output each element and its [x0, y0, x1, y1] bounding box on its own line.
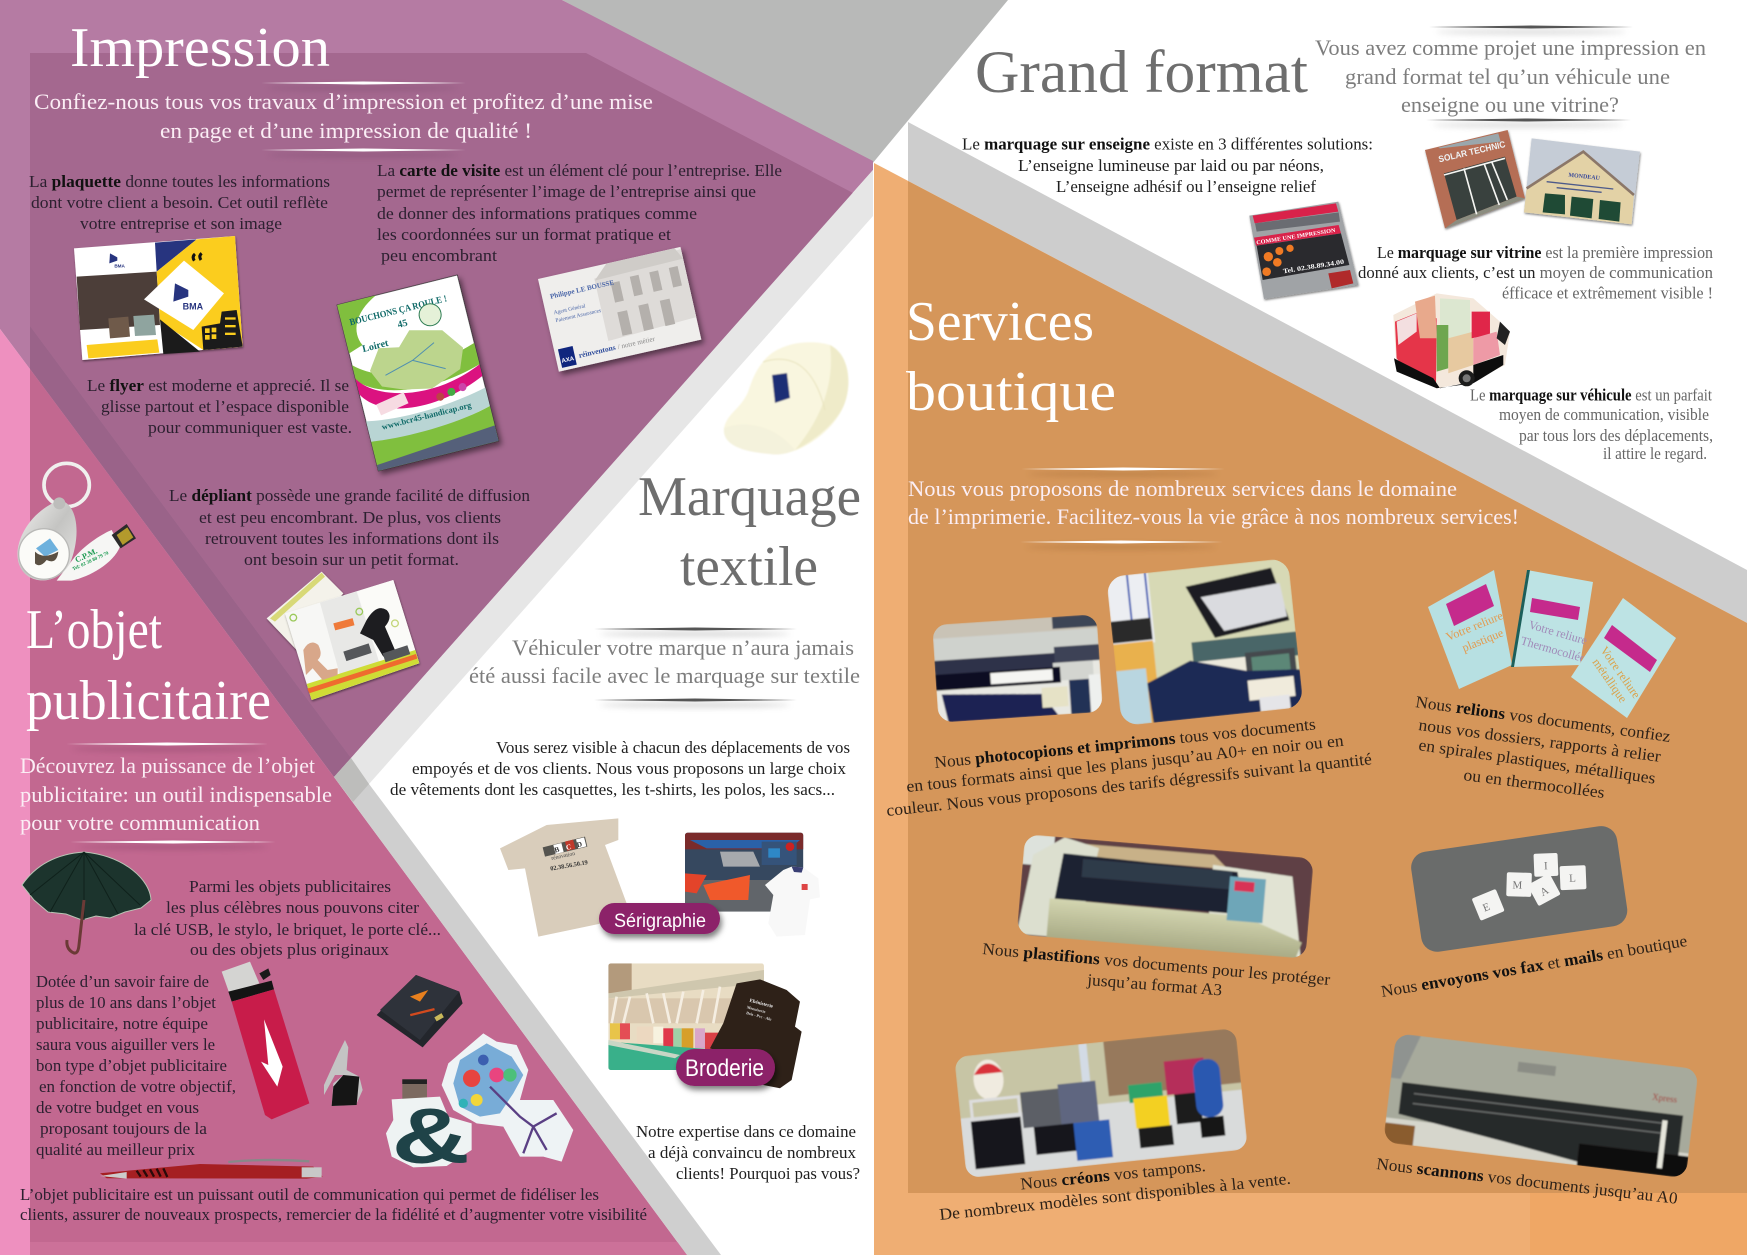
text: textile intro — [469, 635, 860, 688]
text: plastifions: Nous plastifions vos documents pour les protéger — [982, 939, 1331, 989]
text: savoir faire: saura vous aiguiller vers le — [36, 1035, 215, 1054]
icon: tile M — [1506, 872, 1532, 897]
image: carte de visite: AXA — [561, 356, 575, 365]
text: services intro: de l’imprimerie. Facilitez-vous la vie grâce à nos nombreux services! — [908, 504, 1519, 529]
photo: large format printer — [932, 614, 1103, 723]
text: objet intro — [20, 753, 332, 835]
background: light grey diagonal band — [351, 170, 873, 784]
label: broderie: Broderie — [685, 1055, 764, 1082]
text: services intro: Nous vous proposons de nombreux services dans le domaine — [908, 476, 1457, 501]
image: carte de visite: / notre métier — [617, 335, 656, 351]
text: depliant: retrouvent toutes les informations dont ils — [205, 529, 499, 548]
image: book thermocollee: Thermocollée — [1519, 633, 1587, 665]
background: services light orange — [874, 163, 1747, 1255]
text: textile intro: été aussi facile avec le marquage sur textile — [469, 663, 860, 688]
text: parmi les objets: ou des objets plus originaux — [190, 940, 390, 959]
text: photocopions: Nous photocopions et imprimons tous vos documents — [933, 714, 1316, 772]
rule: services top — [1021, 468, 1225, 477]
panel: impression — [29, 17, 782, 700]
image: embroidery — [608, 963, 802, 1088]
text: carte de visite: peu encombrant — [381, 246, 497, 265]
image: book plastique — [1428, 570, 1512, 689]
image: carte de visite: réinventons — [578, 343, 616, 360]
text: photocopions — [885, 714, 1373, 820]
image: book thermocollee — [1511, 570, 1593, 667]
text: objet conclusion: clients, assurer de nouveaux prospects, remercier de la fidélité et d’augmenter votre visibilité — [20, 1205, 647, 1224]
image: t-shirts and screen printing: D — [576, 839, 583, 849]
photo: scanner: Xpress — [1652, 1092, 1678, 1105]
text: photocopions: en tous formats ainsi que les plans jusqu’au A0+ en noir ou en — [905, 731, 1345, 796]
photo: Solar Technic: SOLAR TECHNIC — [1438, 139, 1507, 164]
text: relions: en spirales plastiques, métalliques — [1417, 735, 1657, 788]
text: plaquette — [29, 172, 330, 233]
label: serigraphie: Sérigraphie — [614, 910, 706, 932]
image: embroidery: Menuiserie — [746, 1004, 766, 1014]
text: savoir faire: Dotée d’un savoir faire de — [36, 972, 209, 991]
title: marquage textile — [638, 466, 861, 598]
photo: enseigne panel — [1249, 202, 1358, 299]
image: USB keychain: C.P.M. — [74, 546, 99, 564]
title: l'objet publicitaire: L’objet — [26, 599, 162, 661]
text: enseigne — [962, 134, 1373, 196]
text: objet conclusion — [20, 1185, 647, 1224]
text: creons: Nous créons vos tampons. — [1020, 1156, 1206, 1193]
icon: tree USB — [442, 1033, 573, 1162]
text: vitrine: donné aux clients, c’est un moyen de communication — [1358, 263, 1714, 282]
rule: grand format bottom — [1426, 118, 1631, 128]
text: vehicule: il attire le regard. — [1603, 444, 1707, 463]
title: services boutique: boutique — [906, 361, 1116, 423]
text: photocopions: couleur. Nous vous proposons des tarifs dégressifs suivant la quantité — [885, 749, 1373, 820]
image: t-shirts and screen printing: C — [565, 842, 572, 852]
title: grand format: Grand format — [975, 39, 1308, 105]
image: book metallique — [1571, 598, 1676, 718]
rule: services bottom — [1020, 540, 1223, 550]
text: flyer: pour communiquer est vaste. — [148, 418, 352, 437]
image: carte de visite: Paiement Assurances — [555, 308, 602, 324]
image: carte de visite: Agent Général — [553, 303, 586, 316]
rule: impression bottom — [261, 148, 466, 158]
rule: objet bottom — [70, 840, 276, 850]
icon: tile I — [1533, 853, 1558, 877]
text: impression intro — [34, 89, 653, 143]
image: plaquette — [74, 236, 243, 360]
text: textile conclusion: Notre expertise dans ce domaine — [636, 1122, 856, 1141]
background: services dark orange — [908, 181, 1747, 1193]
background: objet rose area — [30, 369, 687, 1255]
text: savoir faire: proposant toujours de la — [40, 1119, 208, 1138]
text: savoir faire: en fonction de votre objectif, — [39, 1077, 236, 1096]
icon: tile I: I — [1544, 860, 1548, 872]
panel: marquage textile — [390, 342, 861, 1183]
text: carte de visite: permet de représenter l’image de l’entreprise ainsi que — [377, 182, 756, 201]
icon: tile E: E — [1481, 901, 1492, 915]
image: plaquette: BMA — [114, 263, 126, 268]
icon: tile A: A — [1538, 885, 1551, 899]
text: vitrine — [1358, 243, 1714, 302]
text: vitrine: éfficace et extrêmement visible ! — [1502, 284, 1713, 302]
text: plastifions: jusqu’au format A3 — [1086, 970, 1223, 999]
rule: impression top — [261, 82, 466, 91]
panel: objet publicitaire — [17, 463, 647, 1224]
text: depliant: et est peu encombrant. De plus, vos clients — [199, 508, 501, 527]
image: flyer — [337, 275, 499, 471]
text: savoir faire: qualité au meilleur prix — [36, 1140, 196, 1159]
image: t-shirts and screen printing: rénovation — [551, 851, 576, 862]
image: depliant — [267, 572, 419, 700]
label: broderie — [676, 1049, 775, 1086]
text: carte de visite — [377, 161, 782, 265]
image: book metallique: Votre reliure — [1598, 644, 1643, 701]
image: book thermocollee: Votre reliure — [1527, 617, 1589, 647]
label: serigraphie — [599, 903, 720, 934]
text: grand format intro: Vous avez comme projet une impression en — [1315, 35, 1706, 60]
image: embroidery: Bois - Pvc - Alu — [746, 1010, 773, 1022]
icon: tile A — [1527, 873, 1561, 906]
rule: textile bottom — [594, 698, 797, 708]
background: top grey triangle — [562, 0, 1008, 164]
text: relions: ou en thermocollées — [1462, 765, 1606, 802]
rule: objet top — [66, 742, 268, 752]
title: impression: Impression — [70, 17, 330, 79]
text: vehicule: moyen de communication, visible — [1499, 405, 1709, 424]
text: relions: Nous relions vos documents, confiez — [1414, 692, 1672, 746]
text: enseigne: L’enseigne lumineuse par laid ou par néons, — [1018, 156, 1324, 175]
text: savoir faire: publicitaire, notre équipe — [36, 1014, 208, 1033]
text: textile body — [390, 738, 850, 799]
image: cap — [724, 342, 848, 455]
photo: stamps — [954, 1028, 1248, 1178]
icon: pen — [100, 1160, 323, 1179]
image: book plastique: plastique — [1460, 626, 1505, 655]
text: savoir faire — [36, 972, 236, 1159]
text: plaquette: La plaquette donne toutes les informations — [29, 172, 330, 191]
rule: grand format top — [1429, 26, 1633, 35]
text: grand format intro — [1315, 35, 1706, 117]
photo: Solar Technic — [1425, 130, 1525, 228]
photo: copier — [1106, 558, 1304, 726]
text: savoir faire: bon type d’objet publicitaire — [36, 1056, 227, 1075]
background: impression light purple — [0, 0, 873, 777]
photo: enseigne panel: COMME UNE IMPRESSION — [1256, 228, 1337, 246]
text: objet intro: publicitaire: un outil indispensable — [20, 782, 332, 807]
text: enseigne: L’enseigne adhésif ou l’enseigne relief — [1056, 177, 1316, 196]
text: grand format intro: enseigne ou une vitrine? — [1401, 92, 1619, 117]
title: l'objet publicitaire: publicitaire — [26, 670, 271, 732]
text: textile conclusion: clients! Pourquoi pas vous? — [676, 1164, 860, 1183]
text: textile intro: Véhiculer votre marque n’aura jamais — [512, 635, 854, 660]
images: promotional objects — [100, 962, 573, 1180]
icon: wallet — [377, 975, 463, 1047]
image: carte de visite — [538, 247, 701, 372]
text: parmi les objets — [134, 877, 441, 959]
panel: grand format — [962, 26, 1714, 463]
photo: Mondeau — [1524, 138, 1640, 224]
icon: nail clipper — [324, 1040, 363, 1106]
text: creons: De nombreux modèles sont disponibles à la vente. — [938, 1169, 1292, 1224]
text: carte de visite: La carte de visite est un élément clé pour l’entreprise. Elle — [377, 161, 782, 180]
text: envoyons: Nous envoyons vos fax et mails en boutique — [1380, 931, 1688, 1001]
icon: ampersand USB — [386, 1079, 472, 1180]
image: USB keychain — [17, 463, 136, 581]
text: parmi les objets: les plus célèbres nous pouvons citer — [166, 898, 419, 917]
photo: scanner — [1383, 1033, 1699, 1178]
text: textile conclusion — [636, 1122, 860, 1183]
text: impression intro: en page et d’une impression de qualité ! — [160, 118, 532, 143]
image: flyer: www.bcr45-handicap.org — [381, 399, 473, 432]
icon: tile L — [1560, 865, 1586, 890]
text: grand format intro: grand format tel qu’un véhicule une — [1345, 64, 1670, 89]
photo: laminator — [1017, 834, 1314, 959]
image: umbrella — [22, 852, 151, 953]
text: flyer: glisse partout et l’espace disponible — [101, 397, 349, 416]
rule: textile top — [594, 628, 797, 637]
text: flyer: Le flyer est moderne et apprecié. Il se — [87, 376, 349, 395]
image: book metallique: métallique — [1590, 656, 1630, 705]
text: services intro — [908, 476, 1519, 529]
icon: tile E — [1472, 889, 1505, 921]
image: book plastique: Votre reliure — [1444, 608, 1505, 644]
text: vehicule: par tous lors des déplacements, — [1519, 426, 1713, 445]
text: savoir faire: de votre budget en vous — [36, 1098, 199, 1117]
text: impression intro: Confiez-nous tous vos travaux d’impression et profitez d’une mise — [34, 89, 653, 114]
title: l'objet publicitaire — [26, 599, 271, 732]
image: flyer: 45 — [396, 318, 409, 331]
image: t-shirts and screen printing: B — [553, 845, 560, 855]
text: plaquette: dont votre client a besoin. Cet outil reflète — [31, 193, 328, 212]
text: depliant: ont besoin sur un petit format. — [244, 550, 459, 569]
text: plaquette: votre entreprise et son image — [80, 214, 282, 233]
images: enseigne photos — [1249, 130, 1640, 388]
text: depliant: Le dépliant possède une grande facilité de diffusion — [169, 486, 531, 505]
text: depliant — [169, 486, 531, 569]
text: parmi les objets: la clé USB, le stylo, le briquet, le porte clé... — [134, 920, 441, 939]
photo: Mondeau: MONDEAU — [1568, 173, 1601, 182]
title: services boutique — [906, 291, 1116, 423]
title: services boutique: Services — [906, 291, 1094, 353]
text: relions — [1414, 692, 1672, 802]
image: embroidery: Ebénisterie — [749, 999, 774, 1010]
text: carte de visite: de donner des informations pratiques comme — [377, 204, 697, 223]
text: objet conclusion: L’objet publicitaire est un puissant outil de communication qui permet de fidéliser les — [20, 1185, 599, 1204]
text: textile body: Vous serez visible à chacun des déplacements de vos — [496, 738, 850, 757]
panel: services boutique — [885, 291, 1699, 1224]
text: vehicule — [1470, 386, 1713, 463]
text: parmi les objets: Parmi les objets publicitaires — [189, 877, 391, 896]
icon: lighter — [222, 962, 309, 1119]
text: textile body: empoyés et de vos clients. Nous vous proposons un large choix — [412, 759, 847, 778]
icon: ampersand USB: & — [392, 1092, 470, 1180]
text: scannons: Nous scannons vos documents jusqu’au A0 — [1376, 1154, 1679, 1208]
background: right bottom orange tint — [1530, 1193, 1747, 1255]
background: rose bottom strip — [30, 1242, 687, 1255]
background: purple darker diagonal band — [30, 326, 351, 777]
photo: email tiles — [1409, 824, 1629, 954]
background: grey diagonal band lower — [334, 758, 721, 1255]
title: marquage textile: textile — [680, 536, 818, 598]
image: USB keychain: Tel: 02 38 80 79 79 — [72, 551, 110, 572]
photo: van — [1393, 293, 1510, 388]
text: savoir faire: plus de 10 ans dans l’objet — [36, 993, 216, 1012]
text: relions: nous vos dossiers, rapports à relier — [1417, 715, 1662, 766]
photo: binding covers — [1428, 570, 1676, 718]
icon: tile L: L — [1569, 873, 1576, 885]
text: textile body: de vêtements dont les casquettes, les t-shirts, les polos, les sacs... — [390, 780, 835, 799]
image: t-shirts and screen printing — [500, 818, 820, 937]
photo: enseigne panel: Tel. 02.38.89.34.00 — [1283, 259, 1345, 275]
text: textile conclusion: a déjà convaincu de nombreux — [648, 1143, 857, 1162]
text: vehicule: Le marquage sur véhicule est un parfait — [1470, 386, 1712, 404]
image: flyer: Loiret — [361, 338, 390, 355]
background: impression dark purple — [30, 53, 853, 758]
icon: tile M: M — [1512, 879, 1523, 892]
background: grey band right page — [874, 122, 1747, 623]
text: vitrine: Le marquage sur vitrine est la première impression — [1377, 243, 1714, 262]
title: marquage textile: Marquage — [638, 466, 861, 528]
image: t-shirts and screen printing: 02.38.56.50.19 — [550, 859, 588, 873]
text: flyer — [87, 376, 352, 437]
background: crossing diamond — [334, 758, 369, 802]
image: plaquette: BMA — [183, 301, 204, 311]
text: carte de visite: les coordonnées sur un format pratique et — [377, 225, 671, 244]
text: objet intro: Découvrez la puissance de l’objet — [20, 753, 316, 778]
image: carte de visite: Philippe LE BOUSSE — [549, 278, 615, 301]
text: objet intro: pour votre communication — [20, 810, 260, 835]
background: objet light pink strip — [0, 329, 30, 1255]
text: enseigne: Le marquage sur enseigne existe en 3 différentes solutions: — [962, 134, 1373, 154]
image: flyer: BOUCHONS ÇA ROULE ! — [349, 294, 448, 328]
